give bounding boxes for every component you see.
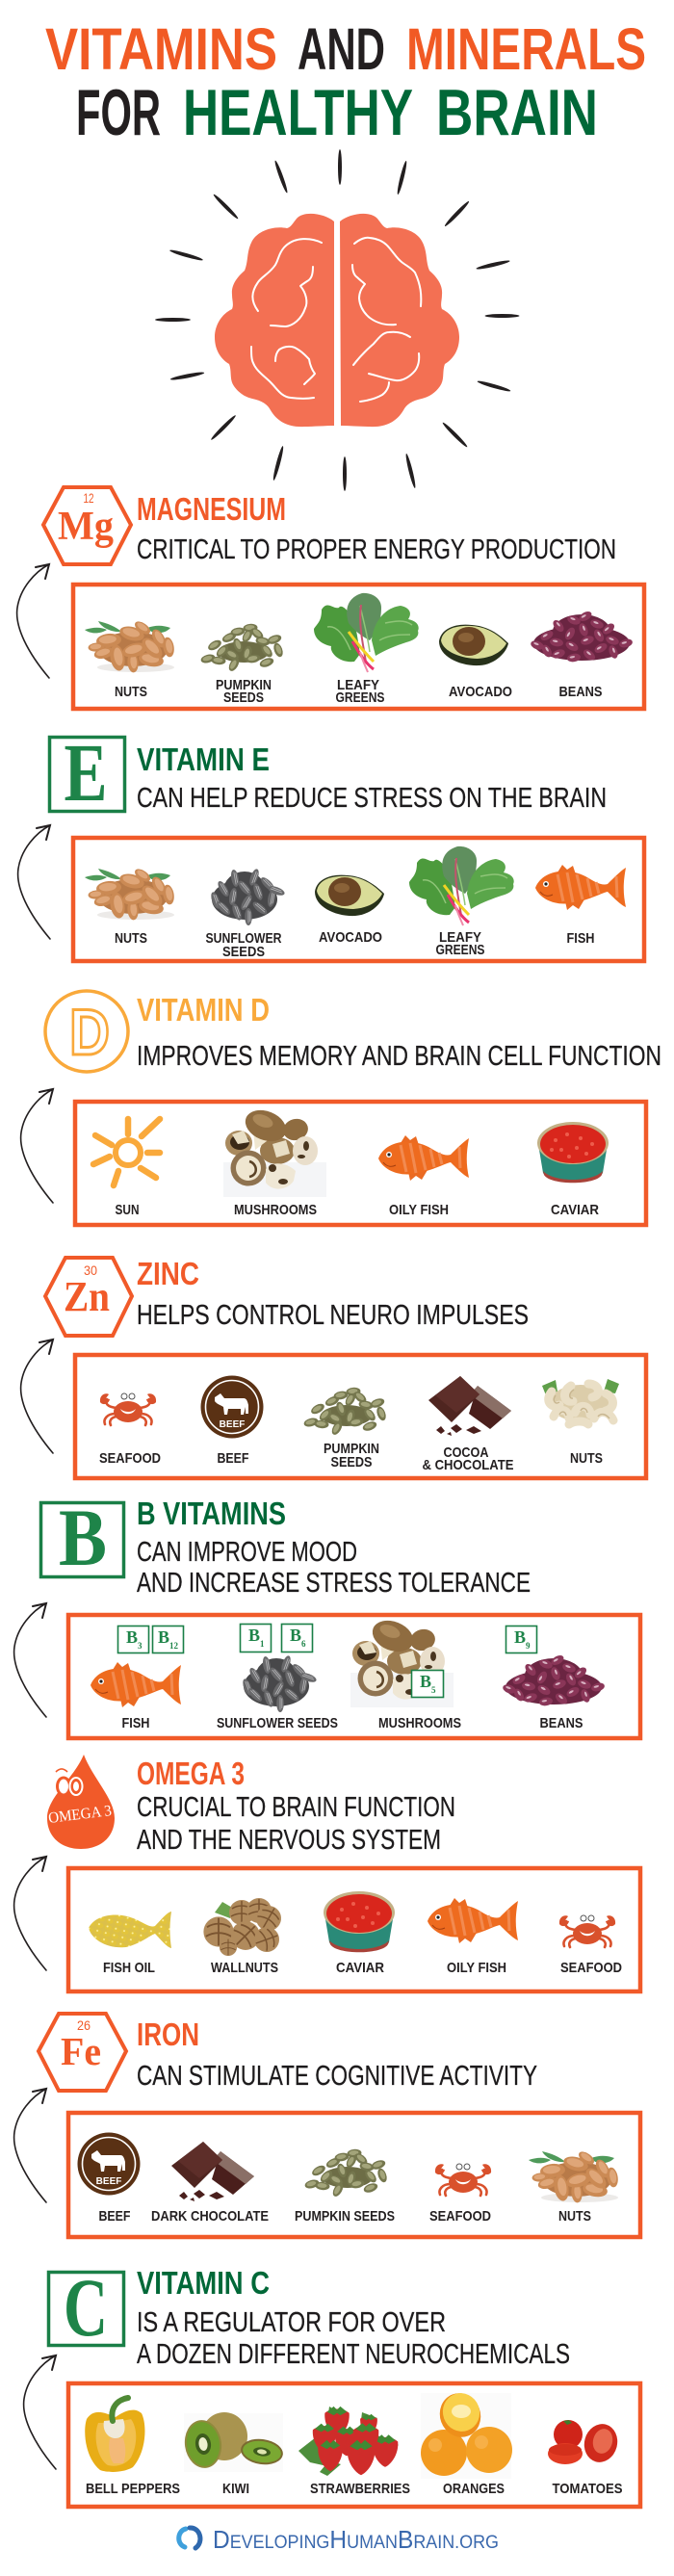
labels: FISH OIL (103, 1960, 155, 1976)
arrow (14, 1603, 46, 1717)
icon: pumpkin seeds (303, 1387, 388, 1437)
tag: B3: 3 (138, 1641, 143, 1651)
arrow (14, 2089, 46, 2202)
text: iron benefit: CAN STIMULATE COGNITIVE ACTIVITY (137, 2061, 537, 2092)
title: AND (298, 16, 385, 82)
arrow (21, 1340, 53, 1453)
text: vitamin C benefit (137, 2307, 570, 2370)
tag: B12 (152, 1626, 183, 1652)
labels: SUNFLOWER (206, 930, 282, 947)
panel: vitamin E foods (73, 838, 644, 961)
icon: beans (502, 1653, 606, 1706)
section: vitamin D (21, 991, 661, 1225)
icon: magnesium hexagon: Mg (58, 505, 114, 549)
icon: leafy greens (314, 593, 419, 672)
labels: COCOA (443, 1444, 489, 1461)
labels: NUTS (115, 930, 147, 947)
icon: omega 3 drop: OMEGA 3 (47, 1803, 113, 1827)
heading: vitamin C: VITAMIN C (137, 2265, 270, 2301)
icon: vitamin E square: E (64, 726, 108, 819)
icon: fish (535, 865, 626, 910)
heading: zinc: ZINC (137, 1256, 199, 1291)
footer logo (179, 2525, 499, 2554)
icon: zinc hexagon: 30 (84, 1262, 97, 1278)
tag: B1: 1 (260, 1639, 265, 1649)
labels: DARK CHOCOLATE (151, 2208, 269, 2225)
title: HEALTHY (183, 76, 413, 149)
labels (115, 677, 603, 706)
labels: PUMPKIN (216, 677, 272, 693)
title: BRAIN (436, 76, 598, 149)
labels (103, 1960, 622, 1976)
labels (86, 2481, 622, 2497)
panel: zinc foods (75, 1355, 646, 1478)
labels: NUTS (558, 2208, 591, 2225)
icon: fish (91, 1662, 181, 1707)
labels (115, 929, 595, 960)
panel: omega 3 foods (68, 1868, 640, 1991)
footer text: DEVELOPINGHUMANBRAIN.ORG (213, 2525, 499, 2554)
section: omega 3 (14, 1755, 640, 1991)
tag: B5: B (420, 1672, 431, 1691)
icon: B square: B (59, 1493, 107, 1583)
labels: MUSHROOMS (234, 1202, 317, 1218)
title: FOR (76, 76, 161, 149)
icon: zinc hexagon (45, 1258, 132, 1336)
labels: AVOCADO (319, 929, 382, 946)
arrow (14, 1857, 46, 1970)
title: VITAMINS (45, 16, 277, 82)
icon: oily fish (378, 1135, 469, 1181)
icon: iron hexagon: Fe (61, 2029, 101, 2073)
labels: & CHOCOLATE (422, 1457, 514, 1473)
section: vitamin E (18, 726, 644, 961)
labels: BEEF (218, 1450, 248, 1467)
labels: FISH (566, 930, 595, 947)
labels: MUSHROOMS (378, 1715, 461, 1731)
labels: CAVIAR (551, 1202, 599, 1218)
icon: oranges (421, 2387, 512, 2479)
icon: bell peppers (85, 2398, 144, 2472)
icon: sun (93, 1119, 160, 1185)
icon: walnuts (203, 1898, 286, 1956)
labels: SEEDS (331, 1454, 372, 1470)
icon: B square (40, 1493, 123, 1583)
icon: dark chocolate (171, 2142, 254, 2201)
labels (116, 1202, 599, 1218)
section: zinc (21, 1256, 646, 1478)
labels: LEAFY (337, 677, 379, 693)
labels: BEANS (558, 684, 603, 700)
text: B vitamins benefit: CAN IMPROVE MOOD (137, 1537, 357, 1568)
icon: strawberries (298, 2407, 399, 2476)
labels: WALLNUTS (211, 1960, 278, 1976)
icon: avocado (315, 875, 384, 916)
section: vitamin C (24, 2261, 640, 2507)
icon: beef: BEEF (220, 1419, 245, 1430)
icon: vitamin D circle (45, 991, 128, 1072)
tag: B5: 5 (431, 1685, 436, 1695)
icon: nuts (85, 619, 175, 673)
arrow (21, 1089, 53, 1203)
labels: SUNFLOWER SEEDS (217, 1715, 338, 1731)
labels (121, 1715, 583, 1731)
text: B vitamins benefit: AND INCREASE STRESS TOLERANCE (137, 1568, 531, 1599)
panel: B vitamin foods (68, 1615, 640, 1738)
tag: B6: 6 (301, 1639, 306, 1649)
tag: B12: B (158, 1627, 169, 1647)
title (45, 16, 646, 149)
icon: cashews (542, 1379, 619, 1424)
labels: TOMATOES (553, 2481, 622, 2497)
labels: BELL PEPPERS (86, 2481, 180, 2497)
icon: magnesium hexagon: 12 (83, 490, 94, 506)
icon: beef (200, 1375, 264, 1439)
labels: OILY FISH (447, 1960, 506, 1976)
labels: BEEF (98, 2208, 131, 2225)
labels: SEAFOOD (429, 2208, 491, 2225)
icon: iron hexagon: 26 (77, 2017, 91, 2033)
tag: B3: B (126, 1627, 138, 1647)
icon: seafood (559, 1915, 615, 1947)
icon: pumpkin seeds (304, 2148, 389, 2199)
tag: B6 (281, 1624, 312, 1652)
icon: seafood (100, 1393, 156, 1425)
labels: SUN (116, 1202, 139, 1218)
heading: vitamin E: VITAMIN E (137, 742, 270, 777)
icon: beans (530, 610, 634, 663)
labels: SEEDS (223, 690, 264, 706)
icon: pumpkin seeds (200, 623, 285, 673)
section: B vitamins (14, 1493, 640, 1738)
labels: AVOCADO (449, 684, 512, 700)
text: omega 3 benefit (137, 1792, 455, 1856)
labels: SEEDS (222, 944, 265, 960)
icon: zinc hexagon: Zn (64, 1273, 110, 1320)
icon: vitamin C square: C (64, 2261, 108, 2354)
text: vitamin C benefit: IS A REGULATOR FOR OVER (137, 2307, 446, 2338)
labels: OILY FISH (389, 1202, 449, 1218)
icon: sunflower seeds (209, 868, 286, 925)
section: iron (14, 2014, 640, 2237)
icon: caviar (537, 1122, 609, 1183)
icon: tomatoes (548, 2420, 622, 2466)
tag: B9: B (514, 1627, 526, 1647)
icon: beef: BEEF (96, 2176, 121, 2187)
tag: B9 (506, 1626, 537, 1652)
icon: sunflower seeds (241, 1654, 318, 1712)
labels: SEAFOOD (99, 1450, 161, 1467)
labels: GREENS (335, 690, 385, 706)
tag: B1 (241, 1624, 272, 1652)
icon: brain with radiating rays (155, 149, 520, 491)
panel: vitamin C foods (68, 2383, 640, 2507)
heading: vitamin D: VITAMIN D (137, 992, 270, 1028)
icon: leafy greens (409, 846, 514, 925)
icon: mushrooms (350, 1615, 454, 1707)
labels: LEAFY (439, 929, 481, 946)
heading: omega 3: OMEGA 3 (137, 1756, 245, 1791)
text: zinc benefit: HELPS CONTROL NEURO IMPULSES (137, 1300, 529, 1331)
icon: seafood (435, 2164, 491, 2196)
labels: GREENS (435, 942, 485, 958)
labels: PUMPKIN (324, 1441, 379, 1457)
icon: oily fish (428, 1898, 518, 1943)
labels: NUTS (115, 684, 147, 700)
icon: nuts (85, 867, 175, 921)
heading: magnesium: MAGNESIUM (137, 491, 286, 527)
icon: fish oil (89, 1912, 171, 1948)
labels: FISH (121, 1715, 150, 1731)
icon: mushrooms (223, 1105, 326, 1197)
icon: iron hexagon (39, 2014, 126, 2091)
icon: vitamin D circle: D (69, 996, 110, 1069)
tag: B9: 9 (526, 1641, 531, 1651)
panel: vitamin D foods (75, 1102, 646, 1225)
icon: caviar (324, 1891, 395, 1952)
heading: B vitamins: B VITAMINS (137, 1496, 286, 1531)
text: B vitamins benefit (137, 1537, 531, 1599)
labels: BEANS (539, 1715, 583, 1731)
panel: magnesium foods (73, 585, 644, 709)
tag: B12: 12 (169, 1641, 179, 1651)
labels: CAVIAR (336, 1960, 384, 1976)
icon: avocado (439, 625, 508, 665)
heading: iron: IRON (137, 2017, 199, 2052)
labels: NUTS (570, 1450, 603, 1467)
labels (98, 2208, 591, 2225)
labels: PUMPKIN SEEDS (295, 2208, 395, 2225)
tag: B5 (412, 1670, 443, 1697)
section: magnesium (17, 487, 644, 709)
labels: ORANGES (443, 2481, 505, 2497)
labels (99, 1441, 603, 1473)
icon: logo ring (179, 2528, 200, 2548)
labels: STRAWBERRIES (310, 2481, 410, 2497)
panel: iron foods (68, 2113, 640, 2237)
labels: KIWI (222, 2481, 249, 2497)
tag: B6: B (290, 1626, 301, 1645)
text: omega 3 benefit: AND THE NERVOUS SYSTEM (137, 1825, 441, 1856)
icon: kiwi (182, 2412, 285, 2472)
icon: magnesium hexagon (43, 487, 131, 564)
labels: SEAFOOD (560, 1960, 622, 1976)
icon: chocolate (428, 1376, 511, 1436)
arrow (18, 825, 50, 939)
arrow (24, 2355, 56, 2469)
tag: B1: B (248, 1626, 260, 1645)
arrow (17, 564, 49, 678)
icon: omega 3 drop (47, 1755, 115, 1849)
icon: nuts (529, 2149, 619, 2203)
tag: B3 (117, 1626, 148, 1652)
icon: beef (77, 2132, 141, 2196)
text: omega 3 benefit: CRUCIAL TO BRAIN FUNCTION (137, 1792, 455, 1823)
